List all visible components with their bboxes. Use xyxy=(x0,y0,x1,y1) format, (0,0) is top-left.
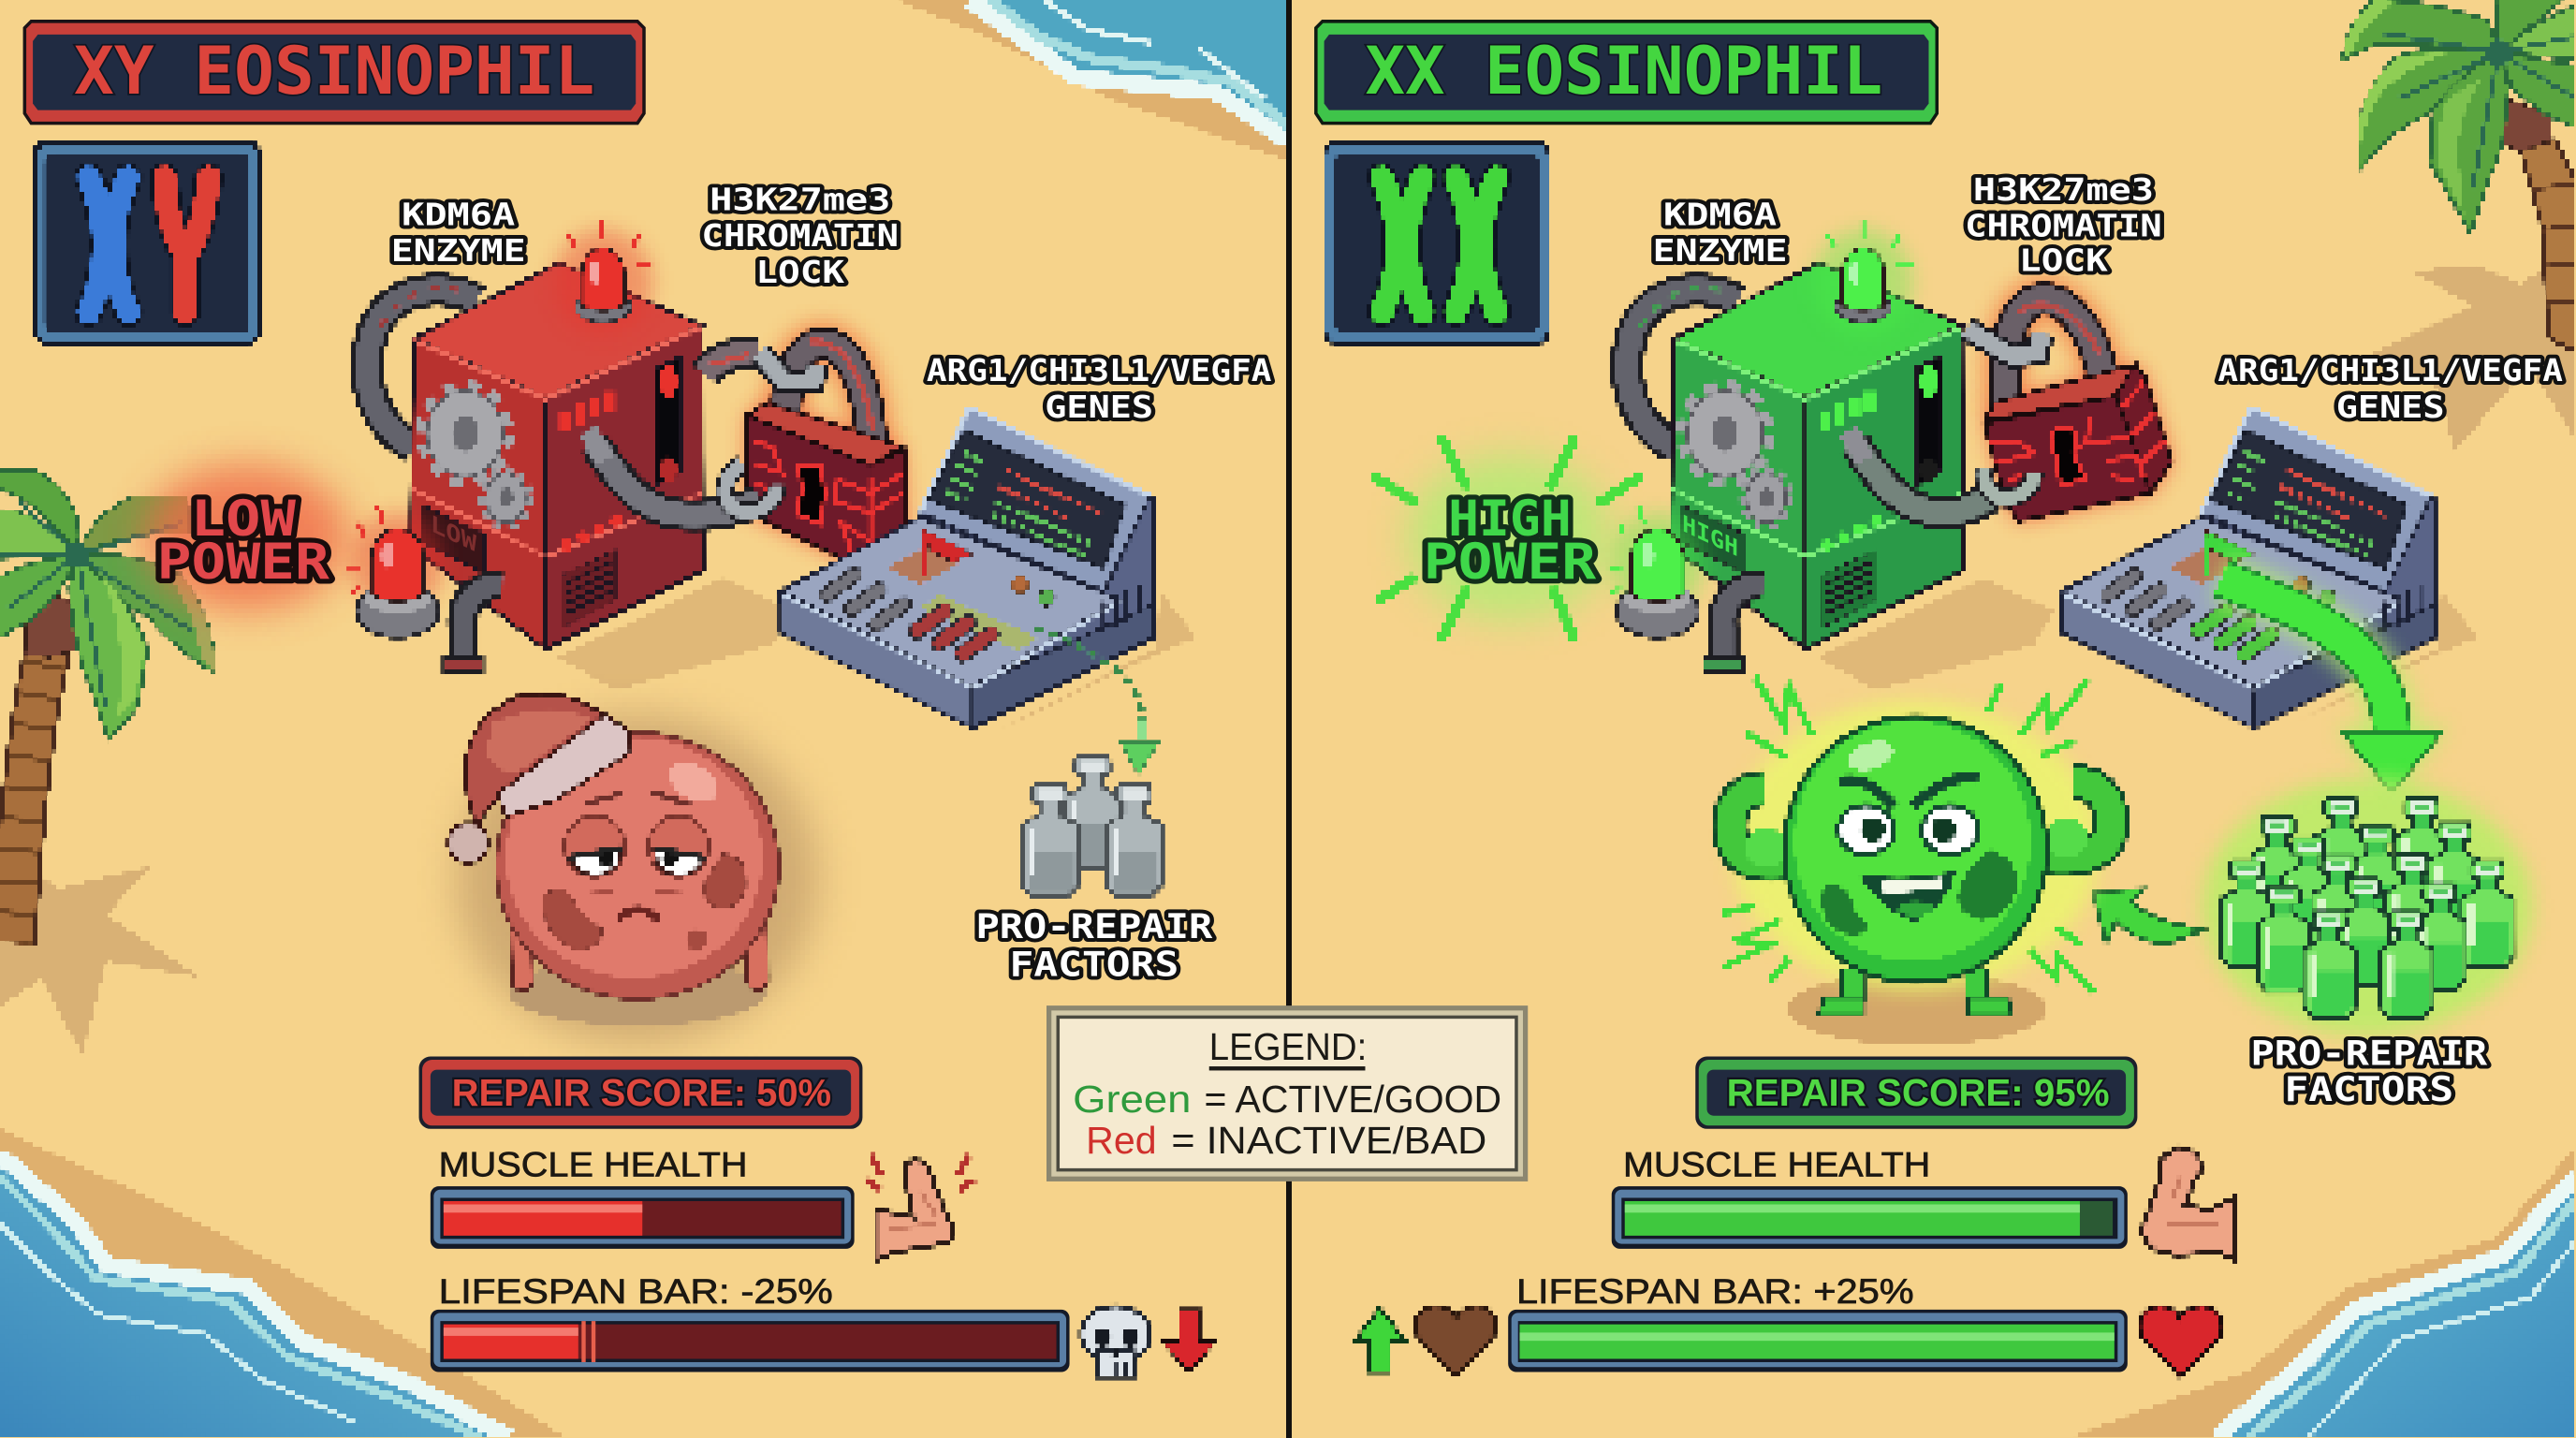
XX panel artwork xyxy=(1323,139,2532,1377)
label: genes xyxy=(927,352,1271,425)
panel: XY eosinophil (low activity) xyxy=(24,22,1271,1377)
palm tree left xyxy=(0,470,215,943)
strong XX eosinophil cell xyxy=(1730,701,2111,1045)
repair score badge: 50% xyxy=(419,1057,862,1129)
green pro-repair factor bottles (many) xyxy=(2203,779,2532,1035)
lifespan bar xyxy=(431,1272,1070,1372)
red padlock: H3K27me3 chromatin lock xyxy=(748,342,907,572)
legend: = INACTIVE/BAD xyxy=(1171,1119,1486,1162)
XX labels, title and meters xyxy=(1316,22,2563,1372)
palm shadow left xyxy=(0,861,200,1055)
muscle health bar xyxy=(1612,1146,2128,1249)
divider line between panels xyxy=(1286,0,1292,1438)
label: pro-repair factors: FACTORS xyxy=(2284,1069,2453,1109)
label: KDM6A enzyme xyxy=(391,196,526,269)
label: KDM6A enzyme: KDM6A xyxy=(402,196,515,232)
label: H3K27me3 chromatin lock: LOCK xyxy=(2019,242,2108,279)
title: XX eosinophil: XX EOSINOPHIL xyxy=(1365,33,1882,110)
label: H3K27me3 chromatin lock: CHROMATIN xyxy=(701,217,899,254)
radiating energy rays xyxy=(1375,440,1640,638)
label: low power xyxy=(157,491,329,591)
skull icon xyxy=(1081,1306,1150,1377)
label: genes: ARG1/CHI3L1/VEGFA xyxy=(927,352,1271,389)
muscle health bar xyxy=(431,1146,855,1249)
label: H3K27me3 chromatin lock: LOCK xyxy=(755,254,844,290)
label: pro-repair factors: PRO-REPAIR xyxy=(976,906,1213,946)
XY panel artwork xyxy=(33,139,1216,1377)
legend: Red xyxy=(1086,1119,1157,1162)
KDM6A enzyme machine (green) xyxy=(1608,220,1963,672)
legend xyxy=(1046,1005,1528,1181)
grey pro-repair factor bottles (few) xyxy=(1022,757,1162,896)
dashed arrow: weak output to factors xyxy=(1035,627,1158,774)
label: H3K27me3 chromatin lock: H3K27me3 xyxy=(1973,171,2154,208)
palm shadow right xyxy=(2374,265,2576,452)
label: KDM6A enzyme: KDM6A xyxy=(1663,196,1777,232)
lifespan bar: LIFESPAN BAR: +25% xyxy=(1516,1272,1914,1311)
label: H3K27me3 chromatin lock: H3K27me3 xyxy=(710,182,890,218)
pipe and clamps from machine to lock xyxy=(1848,329,2042,513)
label: high power xyxy=(1424,491,1596,591)
flexed muscle icon xyxy=(2141,1147,2236,1260)
label: genes: GENES xyxy=(1045,389,1153,425)
XY labels, title and meters xyxy=(24,22,1271,1372)
label: low power: POWER xyxy=(157,534,329,591)
palm tree right xyxy=(2343,0,2576,350)
label: pro-repair factors: FACTORS xyxy=(1010,945,1178,985)
title: XY eosinophil: XY EOSINOPHIL xyxy=(74,33,594,110)
label: high power: POWER xyxy=(1424,534,1596,591)
lifespan bar xyxy=(1508,1272,2128,1372)
ocean: bottom-left corner xyxy=(0,1129,567,1438)
up arrow xyxy=(1355,1308,1405,1372)
repair score badge: 50%: REPAIR SCORE: 50% xyxy=(452,1071,831,1114)
ocean: top-left panel corner xyxy=(896,0,1288,161)
label: KDM6A enzyme: ENZYME xyxy=(391,232,526,269)
pipe and clamps from machine to lock xyxy=(588,353,816,515)
label: pro-repair factors xyxy=(976,906,1213,985)
KDM6A enzyme machine (red) xyxy=(348,220,703,672)
sleepy XY eosinophil cell xyxy=(448,695,818,1043)
label: H3K27me3 chromatin lock xyxy=(701,182,899,290)
label: low power: LOW xyxy=(191,491,296,548)
big green output arrow xyxy=(2221,579,2448,801)
down arrow xyxy=(1162,1310,1216,1372)
label: pro-repair factors: PRO-REPAIR xyxy=(2250,1033,2488,1073)
small arrow to cell xyxy=(2093,889,2203,943)
muscle health bar: MUSCLE HEALTH xyxy=(1623,1146,1930,1184)
panel: XX eosinophil (high activity) xyxy=(1316,22,2563,1377)
machine sign: low: LOW xyxy=(431,510,476,559)
gene console (green state) xyxy=(2062,407,2435,728)
repair score badge: 95%: REPAIR SCORE: 95% xyxy=(1727,1071,2110,1114)
lifespan bar: LIFESPAN BAR: -25% xyxy=(439,1272,833,1311)
legend: Green xyxy=(1073,1078,1191,1121)
gene console (red state) xyxy=(781,407,1153,728)
XX chromosome icon xyxy=(1323,139,1551,345)
ocean: bottom-right corner xyxy=(2069,1147,2576,1438)
glow: low power xyxy=(144,465,348,609)
brown heart xyxy=(1415,1306,1496,1377)
repair score badge: 95% xyxy=(1695,1057,2137,1129)
title: XY eosinophil xyxy=(24,22,644,124)
XY chromosome icon xyxy=(33,139,261,345)
machine and console ground shadows xyxy=(1819,579,2478,736)
machine and console ground shadows xyxy=(559,579,1196,736)
label: KDM6A enzyme xyxy=(1653,196,1788,269)
label: H3K27me3 chromatin lock: CHROMATIN xyxy=(1965,208,2162,244)
energy bolts around cell xyxy=(1721,677,2093,992)
label: pro-repair factors xyxy=(2250,1033,2488,1109)
red heart xyxy=(2140,1306,2222,1377)
label: H3K27me3 chromatin lock xyxy=(1965,171,2162,279)
strained muscle icon xyxy=(866,1155,974,1260)
red padlock: H3K27me3 chromatin lock xyxy=(1984,299,2172,521)
flexing arms and legs xyxy=(1730,782,2111,1016)
label: high power: HIGH xyxy=(1448,491,1572,548)
muscle health bar: MUSCLE HEALTH xyxy=(439,1146,748,1184)
label: genes xyxy=(2217,352,2563,425)
label: genes: GENES xyxy=(2336,389,2445,425)
legend: LEGEND: xyxy=(1209,1025,1367,1068)
glow: high power xyxy=(1408,455,1612,620)
legend: = ACTIVE/GOOD xyxy=(1204,1078,1501,1121)
label: KDM6A enzyme: ENZYME xyxy=(1653,232,1788,269)
machine sign: high: HIGH xyxy=(1682,510,1738,563)
title: XX eosinophil xyxy=(1316,22,1937,124)
label: genes: ARG1/CHI3L1/VEGFA xyxy=(2217,352,2563,389)
